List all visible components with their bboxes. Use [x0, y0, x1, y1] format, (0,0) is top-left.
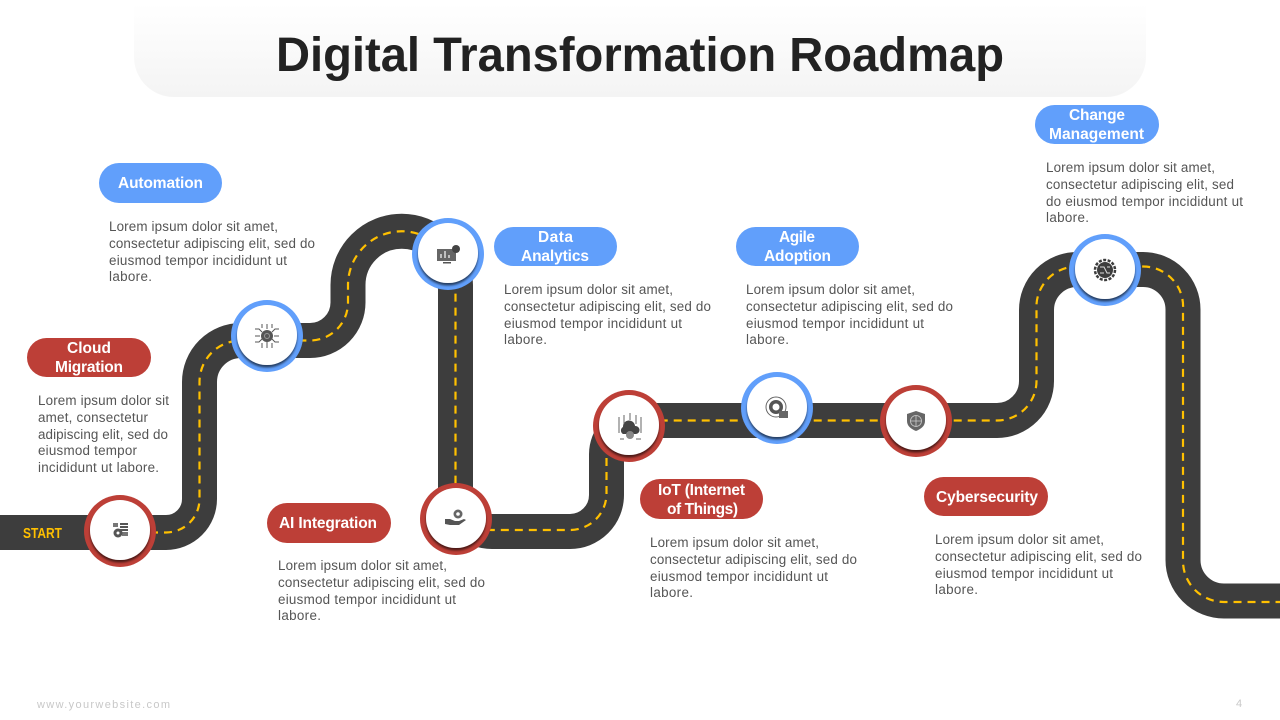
description: Change Management: [1046, 160, 1243, 225]
icon: hand with gear: [445, 510, 466, 525]
pill: Automation: [99, 163, 222, 203]
description: Agile Adoption: eiusmod tempor incididunt ut: [746, 316, 924, 331]
title: Digital Transformation Roadmap: [276, 29, 1004, 82]
description: AI Integration: labore.: [278, 608, 321, 623]
pill: Automation: Automation: [118, 175, 203, 192]
pill: Change Management: Management: [1049, 126, 1144, 143]
footer website: www.yourwebsite.com: [36, 699, 170, 711]
icon: server with gear: [113, 523, 128, 538]
marker: IoT: [593, 390, 665, 462]
marker: Automation: [231, 300, 303, 372]
pill: Data Analytics: Data: [538, 229, 573, 246]
description: Cloud Migration: [38, 393, 169, 475]
description: Change Management: do eiusmod tempor incididunt ut: [1046, 194, 1243, 209]
description: Cloud Migration: adipiscing elit, sed do: [38, 427, 168, 442]
pill: Change Management: Change: [1069, 107, 1125, 124]
pill: Agile Adoption: [736, 227, 859, 266]
description: IoT: eiusmod tempor incididunt ut: [650, 569, 828, 584]
pill: IoT: IoT (Internet: [658, 482, 745, 499]
title banner: [134, 4, 1146, 97]
marker: Change Management: [1069, 234, 1141, 306]
pill: Cloud Migration: [27, 338, 151, 377]
winding road: [0, 231, 1280, 602]
description: Data Analytics: [504, 282, 711, 347]
description: IoT: consectetur adipiscing elit, sed do: [650, 552, 857, 567]
start label: START: [23, 525, 62, 542]
description: Automation: consectetur adipiscing elit, sed do: [109, 236, 315, 251]
description: Automation: Lorem ipsum dolor sit amet,: [109, 219, 278, 234]
description: Change Management: labore.: [1046, 210, 1089, 225]
marker: Agile Adoption: [741, 372, 813, 444]
description: Agile Adoption: [746, 282, 953, 347]
pill: Cybersecurity: Cybersecurity: [936, 489, 1038, 506]
description: Cybersecurity: [935, 532, 1142, 597]
description: IoT: [650, 535, 857, 600]
description: IoT: labore.: [650, 585, 693, 600]
pill: Cloud Migration: Migration: [55, 359, 123, 376]
description: Data Analytics: labore.: [504, 332, 547, 347]
description: Data Analytics: Lorem ipsum dolor sit amet,: [504, 282, 673, 297]
marker: AI Integration: [420, 483, 492, 555]
pill: Change Management: [1035, 105, 1159, 144]
description: AI Integration: Lorem ipsum dolor sit amet,: [278, 558, 447, 573]
description: Cloud Migration: eiusmod tempor: [38, 443, 138, 458]
pill: AI Integration: [267, 503, 391, 543]
pill: Agile Adoption: Agile: [779, 229, 815, 246]
marker: Data Analytics: [412, 218, 484, 290]
pill: IoT: [640, 479, 763, 519]
pill: IoT: of Things): [667, 501, 738, 518]
description: Cybersecurity: labore.: [935, 582, 978, 597]
icon: agile gear cycle: [766, 397, 788, 418]
description: Change Management: consectetur adipiscing elit, sed: [1046, 177, 1234, 192]
description: Cybersecurity: consectetur adipiscing elit, sed do: [935, 549, 1142, 564]
pill: Data Analytics: [494, 227, 617, 266]
description: AI Integration: consectetur adipiscing elit, sed do: [278, 575, 485, 590]
description: AI Integration: eiusmod tempor incididunt ut: [278, 592, 456, 607]
description: Data Analytics: consectetur adipiscing elit, sed do: [504, 299, 711, 314]
icon: shield with globe: [907, 411, 925, 431]
pill: AI Integration: AI Integration: [279, 515, 377, 532]
pill: Agile Adoption: Adoption: [764, 248, 831, 265]
description: Automation: eiusmod tempor incididunt ut: [109, 253, 287, 268]
description: Cloud Migration: amet, consectetur: [38, 410, 149, 425]
icon: change gear: [1095, 260, 1115, 280]
description: AI Integration: [278, 558, 485, 623]
icon: analytics monitor: [437, 245, 460, 264]
description: Cloud Migration: incididunt ut labore.: [38, 460, 159, 475]
marker: Cybersecurity: [880, 385, 952, 457]
description: Change Management: Lorem ipsum dolor sit amet,: [1046, 160, 1215, 175]
description: Data Analytics: eiusmod tempor incididunt ut: [504, 316, 682, 331]
description: Cybersecurity: Lorem ipsum dolor sit amet,: [935, 532, 1104, 547]
description: Agile Adoption: Lorem ipsum dolor sit amet,: [746, 282, 915, 297]
page number: 4: [1236, 698, 1242, 710]
pill: Data Analytics: Analytics: [521, 248, 589, 265]
description: Automation: labore.: [109, 269, 152, 284]
marker: Cloud Migration: [84, 495, 156, 567]
description: Cloud Migration: Lorem ipsum dolor sit: [38, 393, 169, 408]
description: Automation: [109, 219, 315, 284]
description: IoT: Lorem ipsum dolor sit amet,: [650, 535, 819, 550]
description: Cybersecurity: eiusmod tempor incididunt ut: [935, 566, 1113, 581]
description: Agile Adoption: consectetur adipiscing elit, sed do: [746, 299, 953, 314]
pill: Cybersecurity: [924, 477, 1048, 516]
description: Agile Adoption: labore.: [746, 332, 789, 347]
pill: Cloud Migration: Cloud: [67, 340, 111, 357]
icon: gear network: [255, 324, 279, 348]
icon: cloud network: [619, 413, 641, 439]
